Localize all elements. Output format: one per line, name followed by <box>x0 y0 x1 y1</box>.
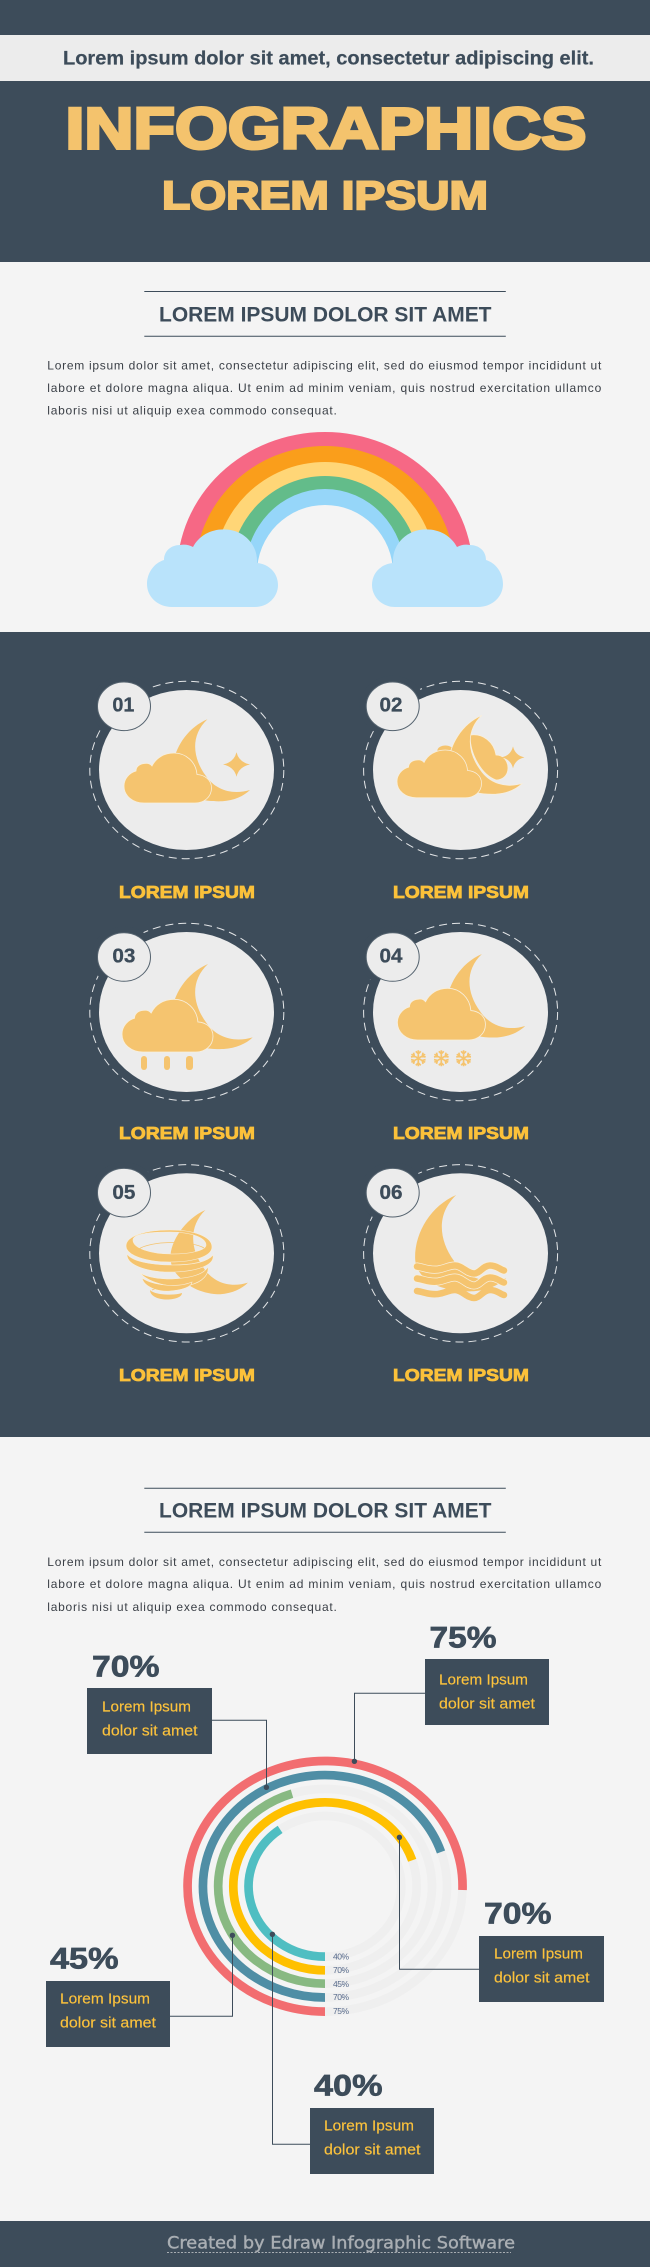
item 03 <box>90 923 284 1143</box>
label 06: LOREM IPSUM <box>393 1365 529 1385</box>
badge 03: 03 <box>112 946 135 968</box>
callout: 70% left: dolor sit amet <box>102 1724 198 1740</box>
icon: moon, cloud, star <box>124 719 250 803</box>
label 02: LOREM IPSUM <box>393 882 529 902</box>
label 04: LOREM IPSUM <box>393 1123 529 1143</box>
callout: 70% right: 70% <box>484 1897 552 1930</box>
badge 02 <box>366 682 419 731</box>
label 05: LOREM IPSUM <box>119 1365 255 1385</box>
radial bar chart: 40% <box>333 1951 349 1961</box>
section heading: LOREM IPSUM DOLOR SIT AMET <box>159 1500 492 1522</box>
item 04 <box>360 923 558 1143</box>
badge 06: 06 <box>380 1182 402 1204</box>
callout: 45%: 45% <box>50 1943 118 1976</box>
callout: 75%: 75% <box>430 1622 496 1654</box>
radial bar chart: 70% <box>333 1965 349 1975</box>
subtitle: LOREM IPSUM <box>162 174 488 218</box>
callout: 45%: Lorem Ipsum <box>60 1991 150 2007</box>
callout: 70% right <box>397 1835 604 2002</box>
main title: INFOGRAPHICS <box>66 96 586 162</box>
footer <box>0 2221 650 2267</box>
badge 01 <box>98 682 150 731</box>
callout: 40%: Lorem Ipsum <box>324 2119 414 2135</box>
item 02 <box>360 676 558 902</box>
callout: 70% left: 70% <box>92 1651 160 1684</box>
callout: 75%: Lorem Ipsum <box>439 1672 528 1688</box>
footer: Created by Edraw Infographic Software <box>167 2233 515 2253</box>
icon: moon, cloud, rain <box>122 964 253 1070</box>
callout: 45%: dolor sit amet <box>60 2015 156 2031</box>
icon: moon, cloud, snow <box>397 954 525 1066</box>
icon: moon and tornado <box>126 1210 248 1300</box>
badge 03 <box>98 933 150 981</box>
radial bar chart: 45% <box>333 1979 349 1989</box>
item 06 <box>360 1162 558 1385</box>
body text: laboris nisi ut aliquip exea commodo consequat. <box>47 403 337 417</box>
badge 06 <box>366 1168 419 1217</box>
radial bar chart: 70% <box>333 1992 349 2002</box>
label 03: LOREM IPSUM <box>119 1123 255 1143</box>
icon: rainbow with clouds <box>147 432 503 607</box>
callout: 70% right: Lorem Ipsum <box>494 1946 583 1962</box>
icon: moon, clouds, star <box>397 715 524 798</box>
callout: 70% right: dolor sit amet <box>494 1970 590 1986</box>
tagline strip: Lorem ipsum dolor sit amet, consectetur adipiscing elit. <box>63 48 594 70</box>
badge 04: 04 <box>380 946 403 968</box>
radial bar chart: 75% <box>333 2006 349 2016</box>
callout: 75% <box>352 1622 549 1764</box>
body text: labore et dolore magna aliqua. Ut enim ad minim veniam, quis nostrud exercitation ullamco <box>47 1577 602 1591</box>
badge 02: 02 <box>380 695 402 717</box>
panel: weather icons <box>0 632 650 1437</box>
tagline strip <box>0 35 650 81</box>
body text: Lorem ipsum dolor sit amet, consectetur adipiscing elit, sed do eiusmod tempor incididunt ut <box>47 1555 602 1569</box>
body text: labore et dolore magna aliqua. Ut enim ad minim veniam, quis nostrud exercitation ullamco <box>47 381 602 395</box>
callout: 40% <box>270 1932 434 2174</box>
panel: rainbow intro <box>48 291 602 607</box>
badge 01: 01 <box>112 695 134 717</box>
badge 04 <box>366 933 419 981</box>
badge 05 <box>98 1168 150 1217</box>
item 05 <box>90 1162 284 1385</box>
header panel <box>0 0 650 262</box>
callout: 40%: dolor sit amet <box>324 2142 420 2158</box>
callout: 70% left <box>87 1651 269 1790</box>
callout: 75%: dolor sit amet <box>439 1696 535 1712</box>
body text: Lorem ipsum dolor sit amet, consectetur adipiscing elit, sed do eiusmod tempor incididunt ut <box>47 358 602 372</box>
body text <box>47 358 602 417</box>
callout: 45% <box>46 1933 235 2047</box>
body text <box>47 1555 602 1614</box>
badge 05: 05 <box>112 1182 135 1204</box>
callout: 70% left: Lorem Ipsum <box>102 1700 191 1716</box>
icon: moon and waves <box>415 1195 506 1298</box>
callout: 40%: 40% <box>314 2070 382 2103</box>
label 01: LOREM IPSUM <box>119 882 255 902</box>
body text: laboris nisi ut aliquip exea commodo consequat. <box>47 1600 337 1614</box>
panel: radial chart section <box>46 1488 604 2174</box>
section heading: LOREM IPSUM DOLOR SIT AMET <box>159 304 492 326</box>
item 01 <box>90 676 284 902</box>
radial bar chart <box>188 1761 463 2016</box>
